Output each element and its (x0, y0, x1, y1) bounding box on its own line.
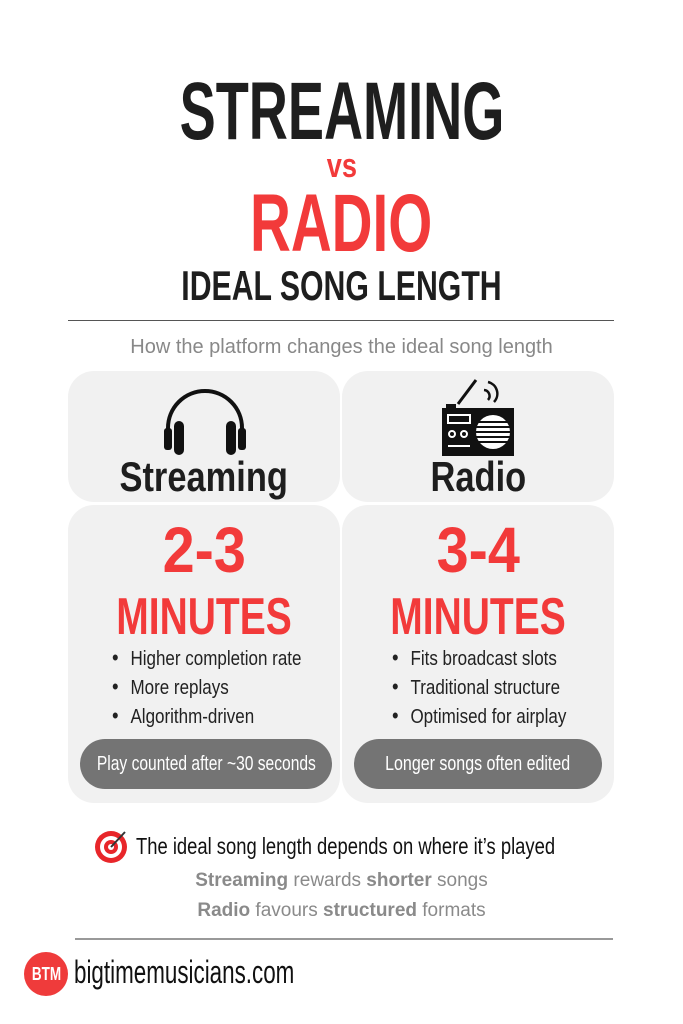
heading: streaming: Streaming (120, 453, 288, 500)
tagline: How the platform changes the ideal song length (130, 336, 553, 358)
bullet list: Algorithm-driven (130, 706, 254, 728)
subtitle heading: IDEAL SONG LENGTH (181, 262, 502, 309)
title: vs: vs (326, 147, 357, 185)
text: radio summary: Radio favours structured formats (197, 900, 486, 921)
icon: target (95, 831, 127, 863)
stat: 2-3 minutes: MINUTES (116, 588, 292, 646)
title: streaming: STREAMING (179, 66, 504, 157)
icon: BTM badge: BTM (31, 964, 61, 984)
bullet list: Traditional structure (410, 677, 560, 699)
stat: 3-4 minutes: 3-4 (436, 514, 520, 586)
bullet list (392, 648, 566, 728)
callout: conclusion: The ideal song length depends on where it’s played (136, 833, 555, 859)
footer logo: bigtimemusicians.com (74, 954, 294, 990)
bullet list: Fits broadcast slots (410, 648, 557, 670)
icon: headphones (164, 389, 246, 455)
panel: streaming details (68, 505, 340, 803)
stat: 3-4 minutes (390, 514, 566, 646)
stat: 3-4 minutes: MINUTES (390, 588, 566, 646)
pill: play counted: Play counted after ~30 seconds (97, 753, 315, 775)
footer logo (24, 952, 294, 996)
bullet list: More replays (130, 677, 229, 699)
bullet list: Optimised for airplay (410, 706, 566, 728)
bullet list (112, 648, 301, 728)
icon: radio (442, 379, 514, 456)
stat: 2-3 minutes (116, 514, 292, 646)
title: radio: RADIO (250, 178, 433, 269)
pill: play counted (80, 739, 332, 789)
panel: streaming header (68, 371, 340, 502)
pill: edited (354, 739, 602, 789)
pill: edited: Longer songs often edited (385, 753, 571, 775)
stat: 2-3 minutes: 2-3 (162, 514, 246, 586)
panel: radio details (342, 505, 614, 803)
bullet list: Higher completion rate (130, 648, 301, 670)
panel: radio header (342, 371, 614, 502)
text: streaming summary: Streaming rewards shorter songs (195, 870, 488, 891)
icon: BTM badge (24, 952, 68, 996)
heading: radio: Radio (430, 453, 526, 500)
